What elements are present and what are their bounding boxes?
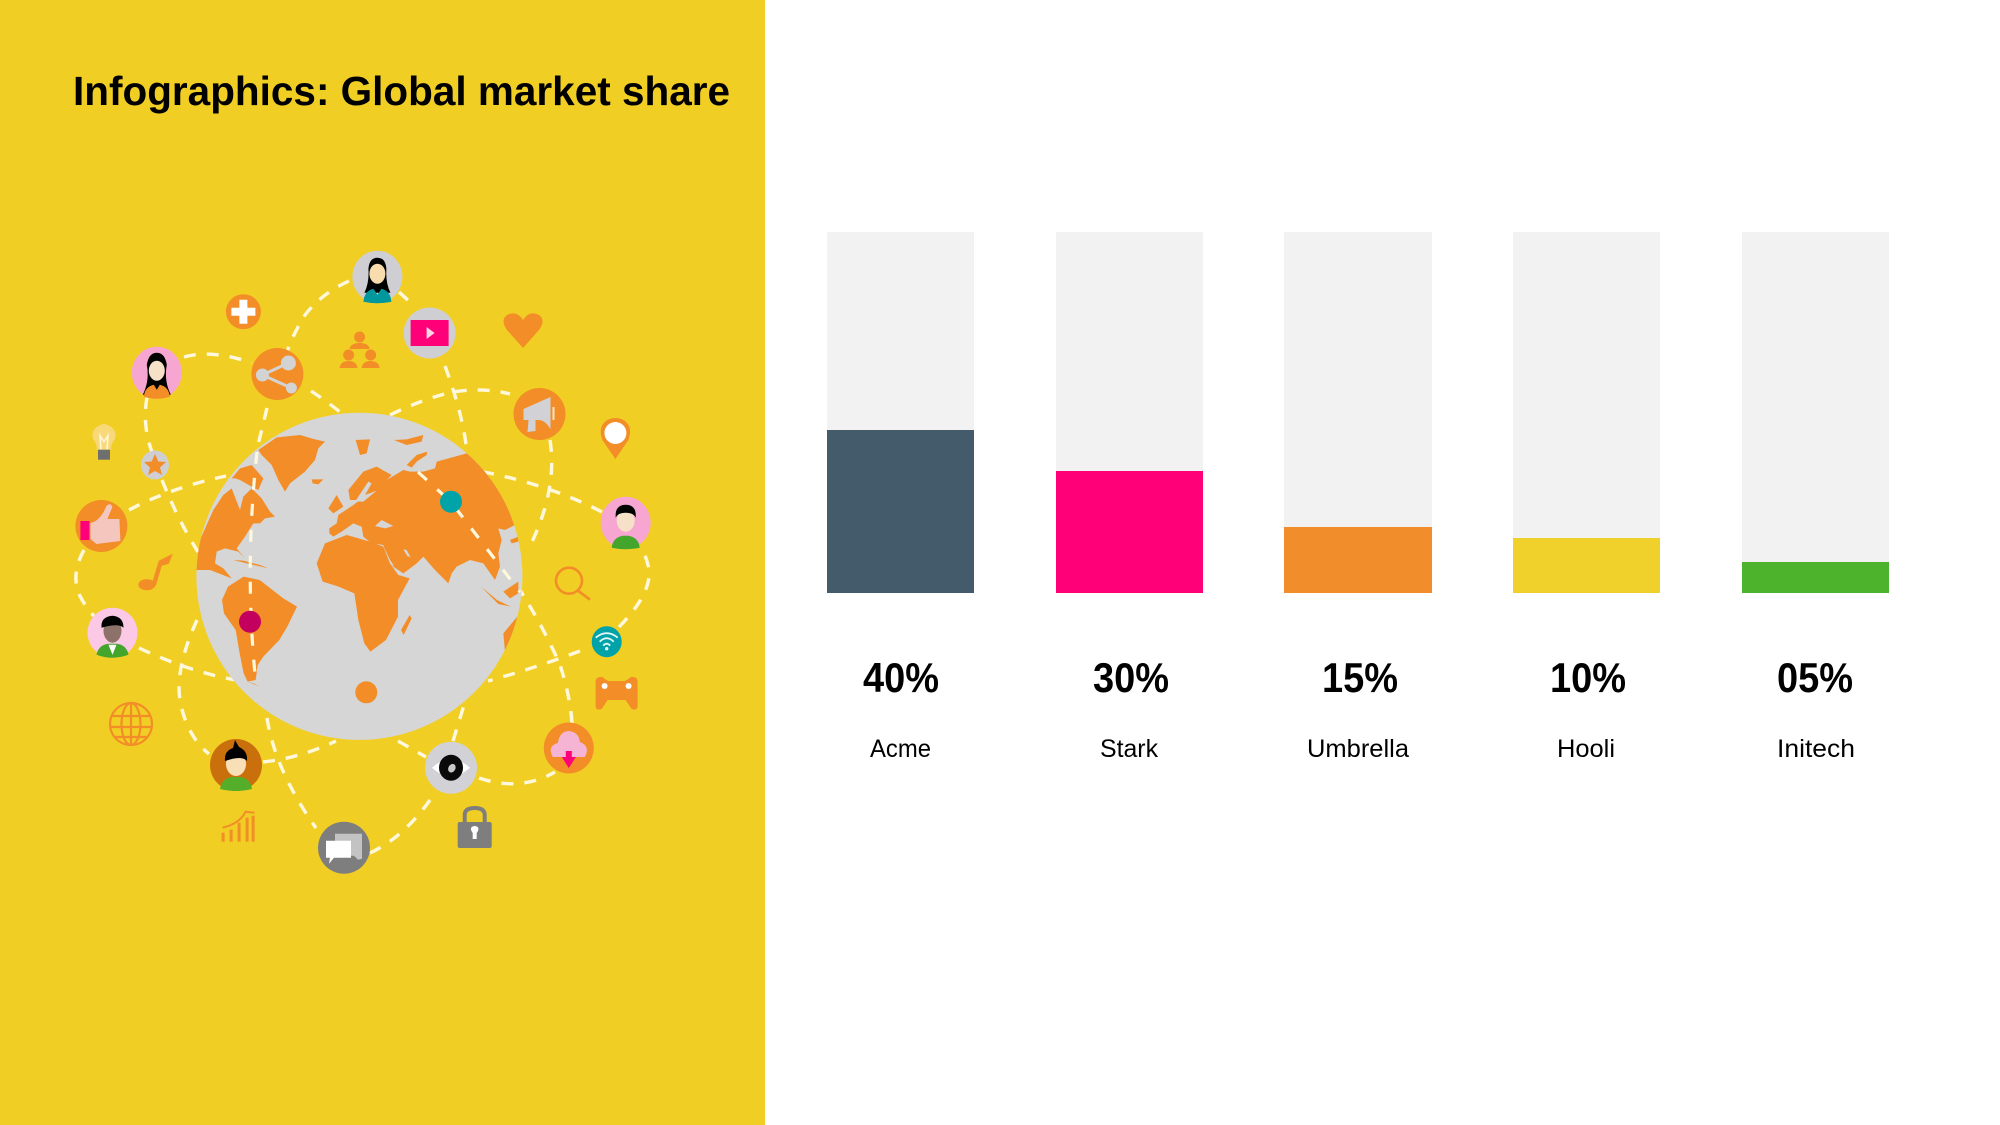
illustration: connected globe	[75, 251, 651, 874]
icon: video	[404, 308, 456, 358]
bar chart: market share	[827, 232, 1889, 593]
bar: Acme 40%	[827, 232, 974, 593]
globe	[196, 413, 522, 740]
value: 30%: 30%	[1093, 654, 1169, 701]
icon: location pin	[601, 418, 630, 459]
continents	[190, 435, 527, 687]
panel: yellow left background	[0, 0, 765, 1125]
bar: Stark 30%	[1056, 232, 1203, 593]
icon: megaphone	[514, 388, 566, 440]
value: 15%: 15%	[1322, 654, 1398, 701]
icon: share	[251, 348, 303, 400]
label: Umbrella: Umbrella	[1307, 735, 1409, 763]
icon: man dark	[88, 608, 138, 658]
bar: Hooli 10%	[1513, 232, 1660, 593]
dashed orbits over globe	[250, 452, 520, 684]
icon: padlock	[458, 808, 492, 848]
icon: plus	[226, 294, 261, 329]
bar: Umbrella 15%	[1284, 232, 1432, 593]
marker: teal dot	[440, 491, 462, 513]
label: Acme: Acme	[870, 735, 931, 763]
icon: bar chart arrow	[222, 812, 255, 842]
icon: wifi	[592, 626, 622, 657]
inland seas	[355, 482, 411, 566]
icon: people	[340, 332, 380, 368]
label: Stark: Stark	[1100, 735, 1158, 763]
icon: wire globe	[110, 703, 152, 745]
value: 40%: 40%	[863, 654, 939, 701]
icon: star	[141, 450, 169, 480]
title: Infographics: Global market share	[73, 68, 730, 114]
icon: chat bubbles	[318, 822, 370, 874]
marker: magenta dot	[239, 611, 261, 633]
label: Hooli: Hooli	[1557, 735, 1615, 763]
icon: woman pink	[132, 347, 182, 399]
icon: woman top	[352, 251, 402, 303]
icon: eye	[425, 742, 477, 794]
icon: light bulb	[92, 424, 116, 460]
icon: man pink	[601, 497, 651, 549]
dashed orbits behind globe	[76, 281, 649, 853]
marker: orange island	[355, 681, 377, 703]
icon: cloud download	[544, 722, 594, 774]
icon: gamepad	[596, 677, 638, 710]
value: 05%: 05%	[1777, 654, 1853, 701]
icon: music note	[138, 554, 173, 590]
icon: heart	[504, 313, 542, 348]
icon: man orange	[210, 739, 262, 791]
icon: thumbs up	[75, 500, 127, 552]
label: Initech: Initech	[1777, 735, 1855, 763]
icon: search	[556, 568, 590, 600]
value: 10%: 10%	[1550, 654, 1626, 701]
bar: Initech 05%	[1742, 232, 1889, 593]
